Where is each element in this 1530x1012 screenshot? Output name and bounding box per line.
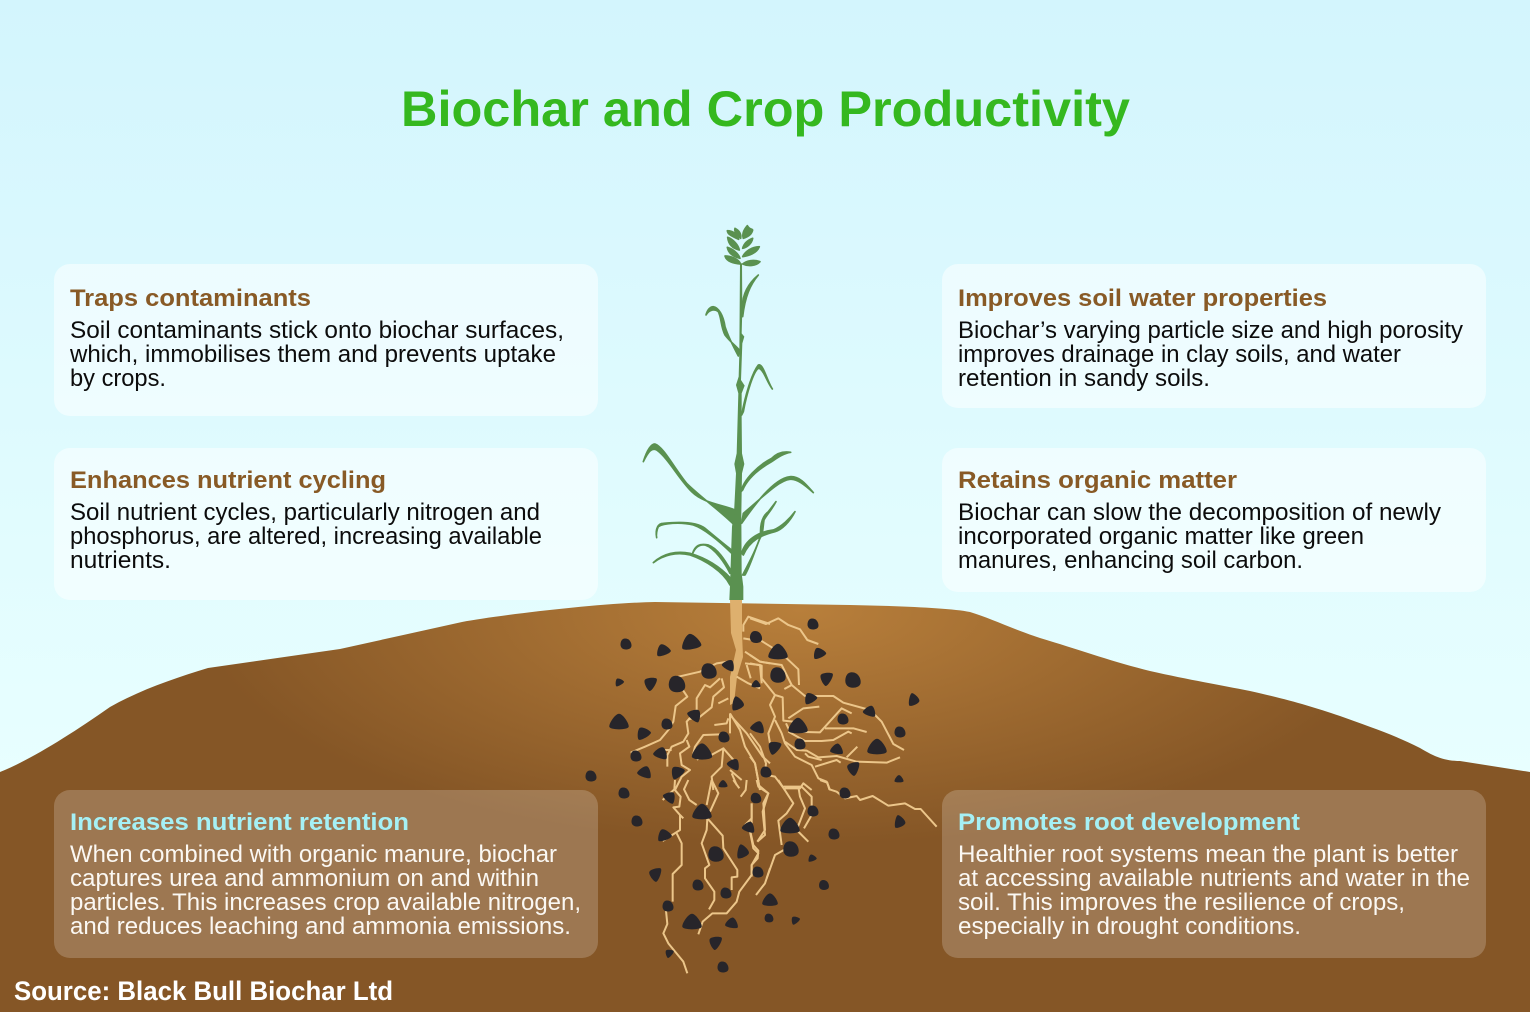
body text — [958, 317, 1463, 392]
panel: retains organic matter — [942, 448, 1486, 592]
body text: improves drainage in clay soils, and water — [958, 341, 1401, 368]
body text: particles. This increases crop available nitrogen, — [70, 889, 581, 916]
heading: Retains organic matter — [958, 467, 1237, 494]
body text: at accessing available nutrients and water in the — [958, 865, 1470, 892]
body text: soil. This improves the resilience of crops, — [958, 889, 1405, 916]
body text: When combined with organic manure, biochar — [70, 841, 557, 868]
body text: especially in drought conditions. — [958, 913, 1301, 940]
background sky — [0, 0, 1530, 780]
body text: by crops. — [70, 365, 166, 392]
body text: Soil contaminants stick onto biochar surfaces, — [70, 317, 564, 344]
title: Biochar and Crop Productivity — [401, 81, 1130, 137]
source credit: Source: Black Bull Biochar Ltd — [14, 976, 393, 1006]
body text: nutrients. — [70, 547, 171, 574]
body text: Soil nutrient cycles, particularly nitrogen and — [70, 499, 540, 526]
body text: manures, enhancing soil carbon. — [958, 547, 1303, 574]
soil hill — [0, 602, 1530, 1012]
body text — [69, 317, 564, 392]
biochar particles — [586, 618, 921, 972]
panel: promotes root development — [942, 790, 1486, 958]
body text: phosphorus, are altered, increasing available — [70, 523, 542, 550]
panel: enhances nutrient cycling — [54, 448, 598, 600]
body text: captures urea and ammonium on and within — [70, 865, 539, 892]
heading: Traps contaminants — [70, 285, 311, 312]
root system — [631, 600, 937, 973]
panel: improves soil water properties — [942, 264, 1486, 408]
body text: and reduces leaching and ammonia emissions. — [70, 913, 571, 940]
heading: Promotes root development — [958, 809, 1300, 836]
body text: Healthier root systems mean the plant is better — [958, 841, 1458, 868]
body text — [958, 841, 1470, 940]
seed head — [725, 226, 760, 266]
body text: incorporated organic matter like green — [958, 523, 1364, 550]
stem — [729, 263, 745, 600]
body text: Biochar’s varying particle size and high porosity — [958, 317, 1463, 344]
body text — [70, 499, 542, 574]
panel: traps contaminants — [54, 264, 598, 416]
body text: Biochar can slow the decomposition of newly — [958, 499, 1441, 526]
body text: which, immobilises them and prevents uptake — [69, 341, 556, 368]
panel: increases nutrient retention — [54, 790, 598, 958]
body text — [958, 499, 1441, 574]
heading: Improves soil water properties — [958, 285, 1327, 312]
body text — [70, 841, 581, 940]
taproot — [730, 600, 743, 705]
body text: retention in sandy soils. — [958, 365, 1210, 392]
plant — [643, 226, 813, 600]
heading: Enhances nutrient cycling — [70, 467, 386, 494]
heading: Increases nutrient retention — [70, 809, 409, 836]
leaves — [643, 275, 813, 585]
